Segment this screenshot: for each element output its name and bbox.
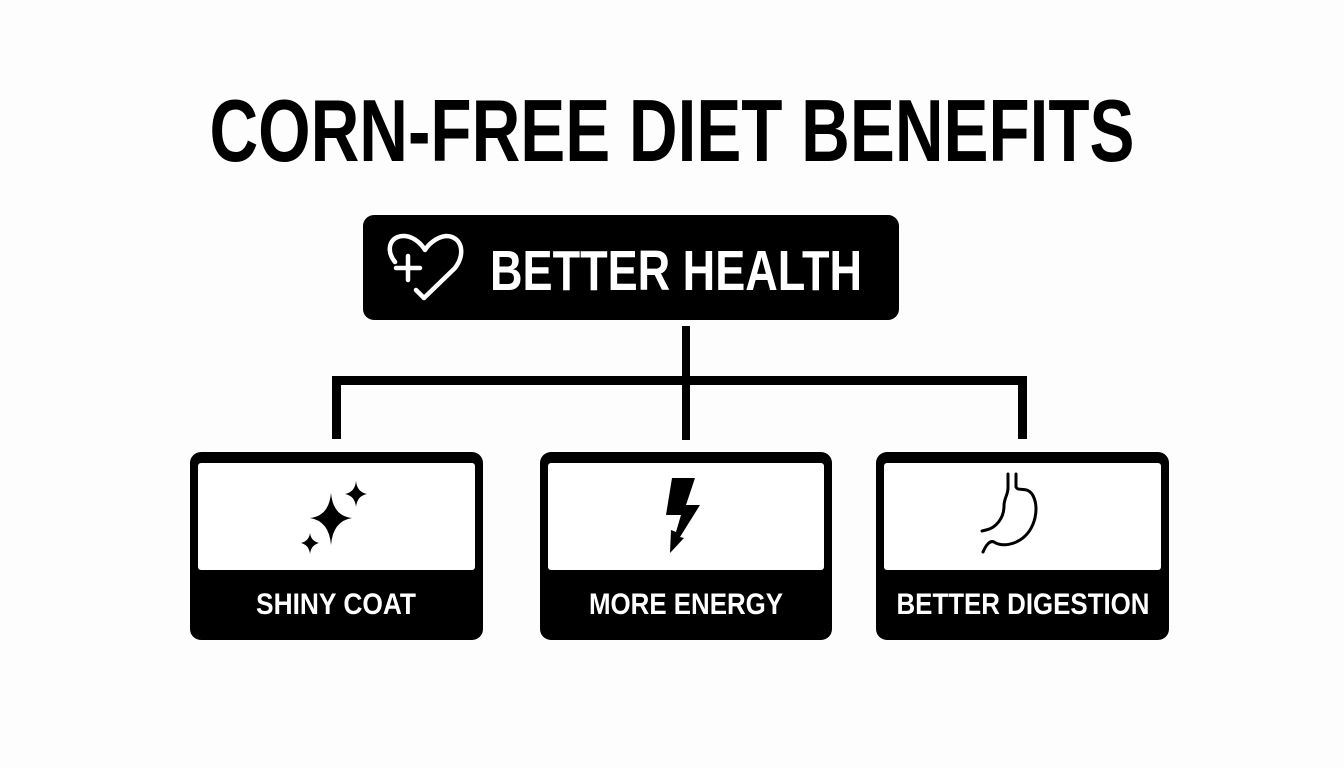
card: shiny coat: SHINY COAT — [256, 588, 416, 621]
card: better digestion — [876, 452, 1169, 640]
connector lines — [332, 326, 1027, 440]
header box: better health: BETTER HEALTH — [490, 239, 862, 303]
card: more energy — [540, 452, 832, 640]
card: shiny coat — [190, 452, 483, 640]
icon: lightning bolt — [666, 478, 700, 553]
icon: stomach — [982, 474, 1036, 552]
card: more energy: MORE ENERGY — [589, 588, 783, 621]
header box: better health — [363, 215, 899, 320]
icon: heart with plus and check — [390, 236, 461, 298]
card: better digestion: BETTER DIGESTION — [896, 588, 1150, 621]
icon: sparkles — [301, 481, 367, 554]
